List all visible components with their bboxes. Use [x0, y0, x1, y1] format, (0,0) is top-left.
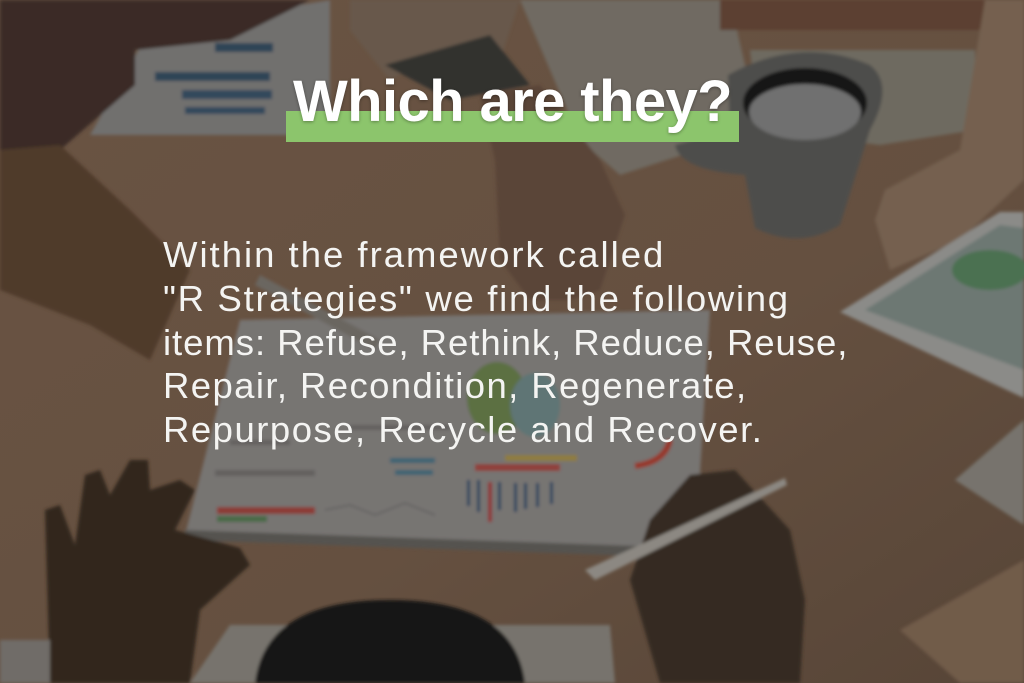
- right hand and tablet: [875, 0, 1024, 270]
- top-center papers: [520, 0, 760, 175]
- body text: items: Refuse, Rethink, Reduce, Reuse,: [163, 322, 848, 363]
- top sleeve: [350, 0, 520, 80]
- heading highlight bar: [286, 111, 739, 142]
- center hand: [480, 85, 625, 300]
- bottom-right hand with pen: [630, 470, 805, 683]
- bottom-left hand: [45, 460, 250, 683]
- center report: [185, 310, 710, 555]
- cup: [675, 52, 882, 238]
- body text: Within the framework called: [163, 234, 665, 275]
- top-left arm: [0, 0, 310, 150]
- left forearm pen: [255, 275, 380, 350]
- title: Which are they?: [293, 69, 732, 134]
- body text: Repurpose, Recycle and Recover.: [163, 409, 763, 450]
- top-left report sheet: [90, 0, 330, 135]
- body text: Repair, Recondition, Regenerate,: [163, 365, 748, 406]
- body text: [163, 234, 848, 450]
- body text: "R Strategies" we find the following: [163, 278, 790, 319]
- bottom-center head: [190, 625, 615, 683]
